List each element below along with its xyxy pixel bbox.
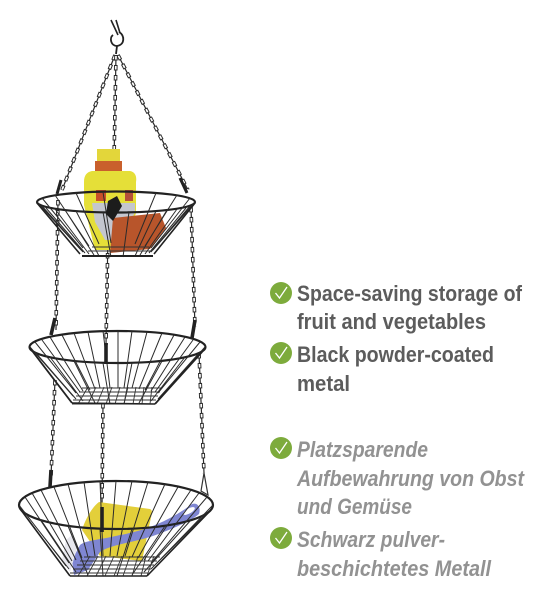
check icon 4 — [270, 527, 292, 549]
hanging hook — [111, 20, 123, 54]
middle wire basket — [30, 318, 206, 404]
English feature 2 — [297, 342, 494, 396]
check icon 1 — [270, 282, 292, 304]
check icon 2 — [270, 342, 292, 364]
English feature 2: Black powder-coated — [297, 342, 494, 367]
top basket contents: bottle and sponge — [84, 149, 166, 253]
German feature 1: Platzsparende — [297, 437, 428, 462]
check icon 3 — [270, 437, 292, 459]
bottom wire basket — [19, 470, 213, 576]
bottom basket contents: purple scoop — [62, 504, 200, 575]
hanging chains — [51, 55, 208, 507]
German feature 2 — [297, 527, 492, 581]
English feature 1: fruit and vegetables — [297, 309, 486, 334]
English feature 2: metal — [297, 371, 350, 396]
German feature 2: beschichtetes Metall — [297, 556, 492, 581]
English feature 1 — [297, 281, 522, 334]
German feature 2: Schwarz pulver- — [297, 527, 445, 552]
German feature 1 — [296, 437, 525, 519]
bottom basket contents: yellow sponge — [82, 502, 152, 561]
German feature 1: und Gemüse — [297, 494, 412, 519]
top wire basket — [37, 178, 195, 257]
